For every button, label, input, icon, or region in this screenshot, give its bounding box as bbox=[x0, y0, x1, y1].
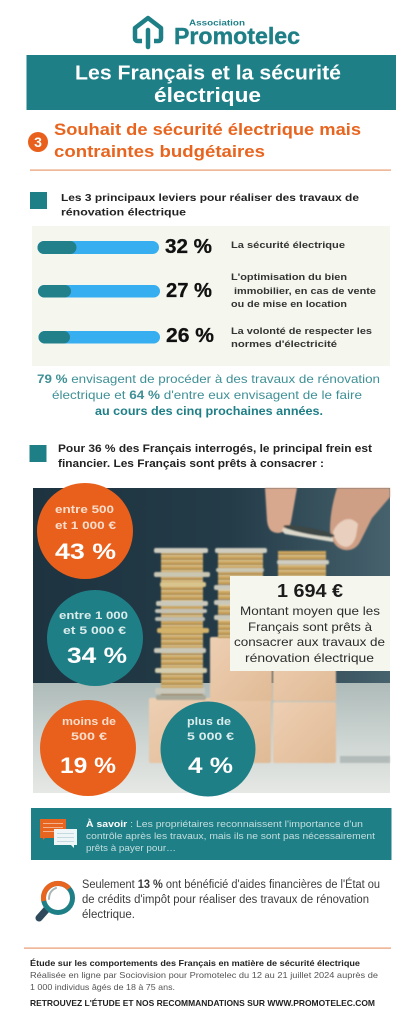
row: 27 % bbox=[38, 272, 376, 310]
text block: 79 %: au cours des cinq prochaines années. bbox=[95, 404, 323, 418]
circle: 19 % bbox=[40, 700, 136, 796]
subheading: leviers: rénovation électrique bbox=[61, 206, 186, 218]
footer bbox=[30, 958, 378, 1008]
circle: 43 % bbox=[37, 483, 133, 579]
row: 26 %: normes d'électricité bbox=[231, 339, 337, 350]
circle: 4 %: plus de bbox=[187, 716, 231, 728]
à savoir text: À savoir : Les propriétaires reconnaissent l'importance d'un bbox=[86, 819, 363, 830]
circle: 4 %: 5 000 € bbox=[187, 731, 234, 743]
callout: 1 694 €: Montant moyen que les bbox=[240, 604, 380, 618]
row: 27 %: 27 % bbox=[166, 280, 212, 302]
circle: 43 %: entre 500 bbox=[55, 504, 114, 516]
callout: 1 694 €: consacrer aux travaux de bbox=[234, 635, 385, 649]
title banner bbox=[26, 55, 396, 110]
icon: speech bubbles bbox=[40, 819, 77, 848]
subheading: leviers bbox=[30, 192, 359, 218]
heading text: Souhait de sécurité électrique mais bbox=[54, 120, 361, 139]
row: 27 %: ou de mise en location bbox=[231, 299, 347, 310]
footer: Étude sur les comportements des Français en matière de sécurité électrique bbox=[30, 958, 360, 968]
footer: 1 000 individus âgés de 18 à 75 ans. bbox=[30, 982, 175, 992]
title banner: électrique bbox=[154, 85, 261, 107]
row: 27 %: L'optimisation du bien bbox=[231, 272, 347, 283]
heading text: contraintes budgétaires bbox=[54, 142, 265, 161]
logo bbox=[135, 18, 300, 49]
section heading bbox=[28, 120, 361, 161]
fingers and coin bbox=[265, 488, 390, 550]
row: 27 %: immobilier, en cas de vente bbox=[234, 286, 376, 297]
subheading: frein financier: financier. Les Français sont prêts à consacrer : bbox=[58, 458, 324, 470]
row: 32 %: 32 % bbox=[165, 236, 212, 258]
circle: 4 % bbox=[160, 702, 256, 796]
circle: 19 %: 500 € bbox=[71, 731, 107, 743]
callout: 1 694 €: 1 694 € bbox=[277, 581, 343, 601]
footer: Réalisée en ligne par Sociovision pour Promotelec du 12 au 21 juillet 2024 auprès de bbox=[30, 970, 378, 980]
circle: 19 %: moins de bbox=[62, 716, 116, 728]
row: 32 % bbox=[38, 236, 345, 258]
row: 26 % bbox=[38, 325, 372, 350]
icon: number 3: 3 bbox=[34, 134, 42, 150]
wooden blocks bbox=[149, 637, 390, 763]
panel: leviers chart bbox=[32, 226, 390, 366]
callout: 1 694 €: Français sont prêts à bbox=[248, 620, 372, 634]
text block: 79 %: électrique et 64 % d'entre eux envisagent de le faire bbox=[52, 388, 362, 402]
text block: 79 % bbox=[37, 372, 380, 418]
title banner: Les Français et la sécurité bbox=[75, 62, 341, 84]
circle: 43 %: 43 % bbox=[55, 539, 116, 564]
à savoir text bbox=[86, 819, 375, 854]
circle: 34 %: entre 1 000 bbox=[59, 610, 128, 622]
circle: 43 %: et 1 000 € bbox=[55, 520, 116, 532]
heading text bbox=[54, 120, 361, 161]
circle: 34 % bbox=[47, 590, 143, 686]
circle: 19 %: 19 % bbox=[60, 753, 116, 778]
text block: 13 % bbox=[82, 878, 380, 921]
text block: 13 %: de crédits d'impôt pour réaliser des travaux de rénovation bbox=[82, 894, 369, 906]
text block: 13 %: Seulement 13 % ont bénéficié d'aides financières de l'État ou bbox=[82, 878, 380, 891]
callout: 1 694 €: rénovation électrique bbox=[245, 651, 374, 665]
photo panel: coins and blocks bbox=[33, 483, 390, 796]
footer: RETROUVEZ L'ÉTUDE ET NOS RECOMMANDATIONS SUR WWW.PROMOTELEC.COM bbox=[30, 998, 375, 1008]
à savoir text: prêts à payer pour… bbox=[86, 843, 176, 854]
icon: magnifying glass bbox=[39, 883, 72, 918]
logo text: Promotelec bbox=[174, 23, 300, 49]
panel: à savoir bbox=[31, 808, 392, 860]
text block: 79 %: 79 % envisagent de procéder à des travaux de rénovation bbox=[37, 372, 380, 386]
circle: 34 %: et 5 000 € bbox=[63, 625, 126, 637]
coin stack middle bbox=[214, 548, 267, 638]
circle: 4 %: 4 % bbox=[188, 753, 233, 778]
coin stack right bbox=[277, 551, 329, 578]
callout: 1 694 € bbox=[230, 576, 390, 671]
logo text: Association bbox=[189, 18, 245, 28]
coin stack left bbox=[154, 548, 210, 700]
text block: 13 %: électrique. bbox=[82, 909, 135, 921]
circle: 34 %: 34 % bbox=[67, 643, 127, 668]
icon: number 3 bbox=[28, 132, 48, 152]
row: 26 %: 26 % bbox=[166, 325, 214, 347]
à savoir text: contrôle après les travaux, mais ils ne sont pas nécessairement bbox=[86, 831, 375, 842]
subheading: leviers: Les 3 principaux leviers pour réaliser des travaux de bbox=[61, 192, 359, 204]
subheading: frein financier bbox=[30, 443, 372, 470]
row: 32 %: La sécurité électrique bbox=[231, 240, 345, 251]
subheading: frein financier: Pour 36 % des Français interrogés, le principal frein est bbox=[58, 443, 372, 455]
row: 26 %: La volonté de respecter les bbox=[231, 326, 372, 337]
icon: house bbox=[135, 18, 161, 47]
